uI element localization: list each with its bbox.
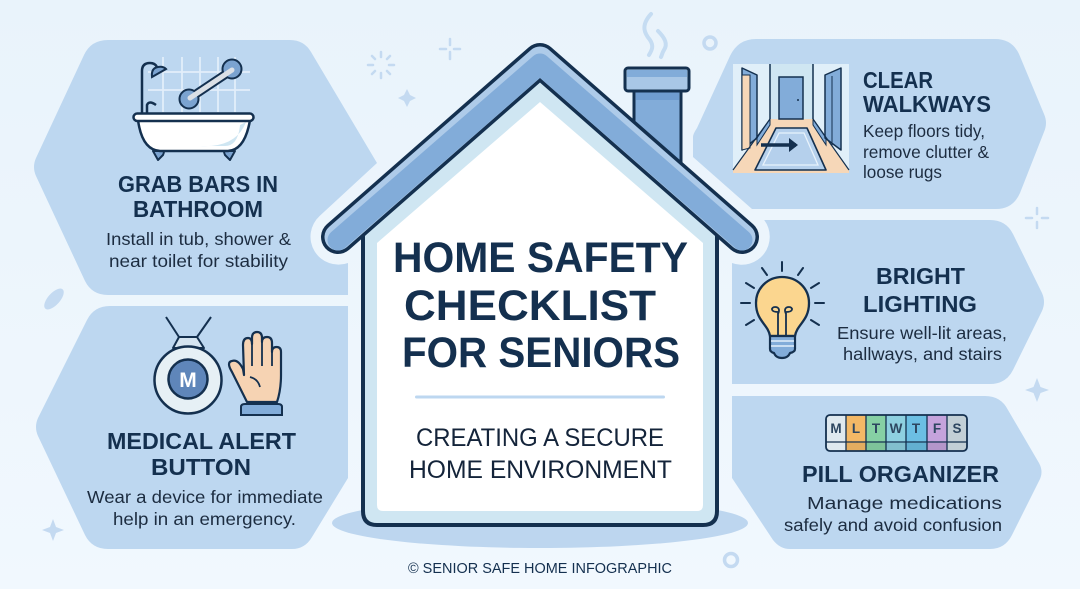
text: bright lighting description: Ensure well-lit areas,	[837, 323, 1007, 343]
icon: weekly pill box: T	[912, 421, 921, 436]
heading: grab bars in bathroom: BATHROOM	[133, 196, 263, 222]
heading: bright lighting	[863, 263, 977, 317]
icon: bathtub with grab bar	[134, 57, 254, 160]
heading: medical alert button	[107, 428, 296, 480]
heading: medical alert button: MEDICAL ALERT	[107, 428, 296, 454]
panel: medical alert button	[36, 306, 348, 549]
heading: grab bars in bathroom	[118, 171, 278, 222]
icon: weekly pill box: T	[872, 421, 881, 436]
icon: light bulb	[741, 262, 824, 358]
icon: weekly pill box	[826, 415, 967, 451]
icon: weekly pill box: W	[890, 421, 903, 436]
icon: weekly pill box: F	[933, 421, 941, 436]
icon: medical alert pendant	[154, 317, 222, 414]
title divider	[415, 396, 665, 398]
title: FOR SENIORS	[402, 329, 680, 377]
house shadow	[332, 498, 748, 548]
heading: grab bars in bathroom: GRAB BARS IN	[118, 171, 278, 197]
text: clear walkways description: loose rugs	[863, 162, 942, 182]
text: pill organizer description	[784, 493, 1002, 535]
heading: clear walkways: CLEAR	[863, 67, 933, 93]
heading: bright lighting: BRIGHT	[876, 263, 965, 289]
icon: raised hand	[229, 332, 282, 415]
icon: weekly pill box: L	[852, 421, 860, 436]
panel: bright lighting	[732, 220, 1044, 384]
heading: clear walkways	[863, 67, 991, 117]
panel: clear walkways	[693, 39, 1046, 209]
chimney	[625, 68, 689, 175]
text: grab bars description	[106, 229, 291, 271]
house body	[363, 75, 717, 525]
text: medical alert description	[87, 487, 323, 529]
text: medical alert description: help in an emergency.	[113, 509, 296, 529]
subtitle	[409, 424, 672, 484]
icon: chimney smoke	[644, 14, 666, 57]
text: medical alert description: Wear a device for immediate	[87, 487, 323, 507]
heading: medical alert button: BUTTON	[151, 454, 251, 480]
panel: pill organizer	[732, 396, 1042, 549]
text: pill organizer description: Manage medications	[807, 493, 1002, 513]
title	[393, 234, 688, 377]
footer copyright: © SENIOR SAFE HOME INFOGRAPHIC	[408, 561, 672, 577]
text: pill organizer description: safely and avoid confusion	[784, 515, 1002, 535]
icon: weekly pill box: M	[830, 421, 842, 436]
text: clear walkways description: Keep floors tidy,	[863, 121, 985, 141]
text: grab bars description: near toilet for stability	[109, 251, 288, 271]
text: grab bars description: Install in tub, shower &	[106, 229, 291, 249]
heading: clear walkways: WALKWAYS	[863, 91, 991, 117]
icon: medical alert pendant: M	[179, 369, 197, 392]
roof	[338, 60, 742, 240]
panel: grab bars in bathroom	[34, 40, 377, 295]
title: HOME SAFETY	[393, 234, 688, 282]
text: clear walkways description: remove clutter &	[863, 142, 989, 162]
heading: bright lighting: LIGHTING	[863, 291, 977, 317]
text: clear walkways description	[863, 121, 989, 182]
text: bright lighting description: hallways, and stairs	[843, 344, 1002, 364]
icon: hallway with rug and arrow	[733, 64, 849, 173]
title: CHECKLIST	[404, 282, 656, 330]
heading: pill organizer: PILL ORGANIZER	[802, 461, 999, 487]
icon: weekly pill box: S	[952, 421, 962, 436]
subtitle: CREATING A SECURE	[416, 424, 664, 452]
subtitle: HOME ENVIRONMENT	[409, 456, 672, 484]
text: bright lighting description	[837, 323, 1007, 364]
